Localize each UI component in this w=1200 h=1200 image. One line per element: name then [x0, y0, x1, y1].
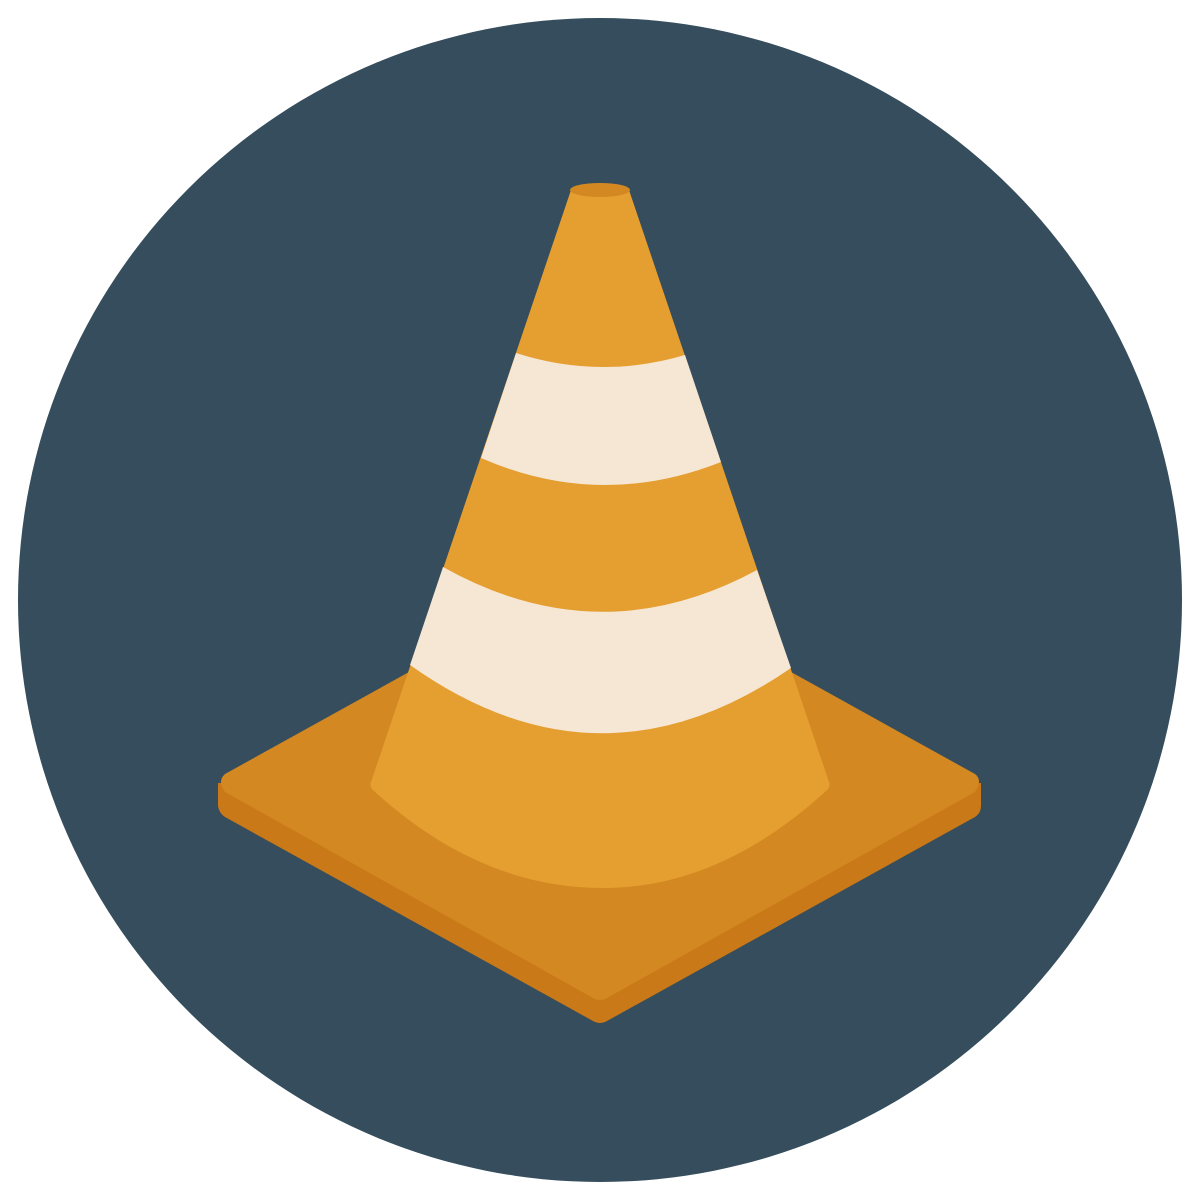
- icon: traffic cone: [218, 183, 981, 1023]
- cone tip: [570, 183, 630, 197]
- stripe upper: [481, 353, 721, 485]
- cone body: [370, 183, 830, 888]
- stripe lower: [410, 567, 791, 733]
- cone base: [218, 568, 981, 1023]
